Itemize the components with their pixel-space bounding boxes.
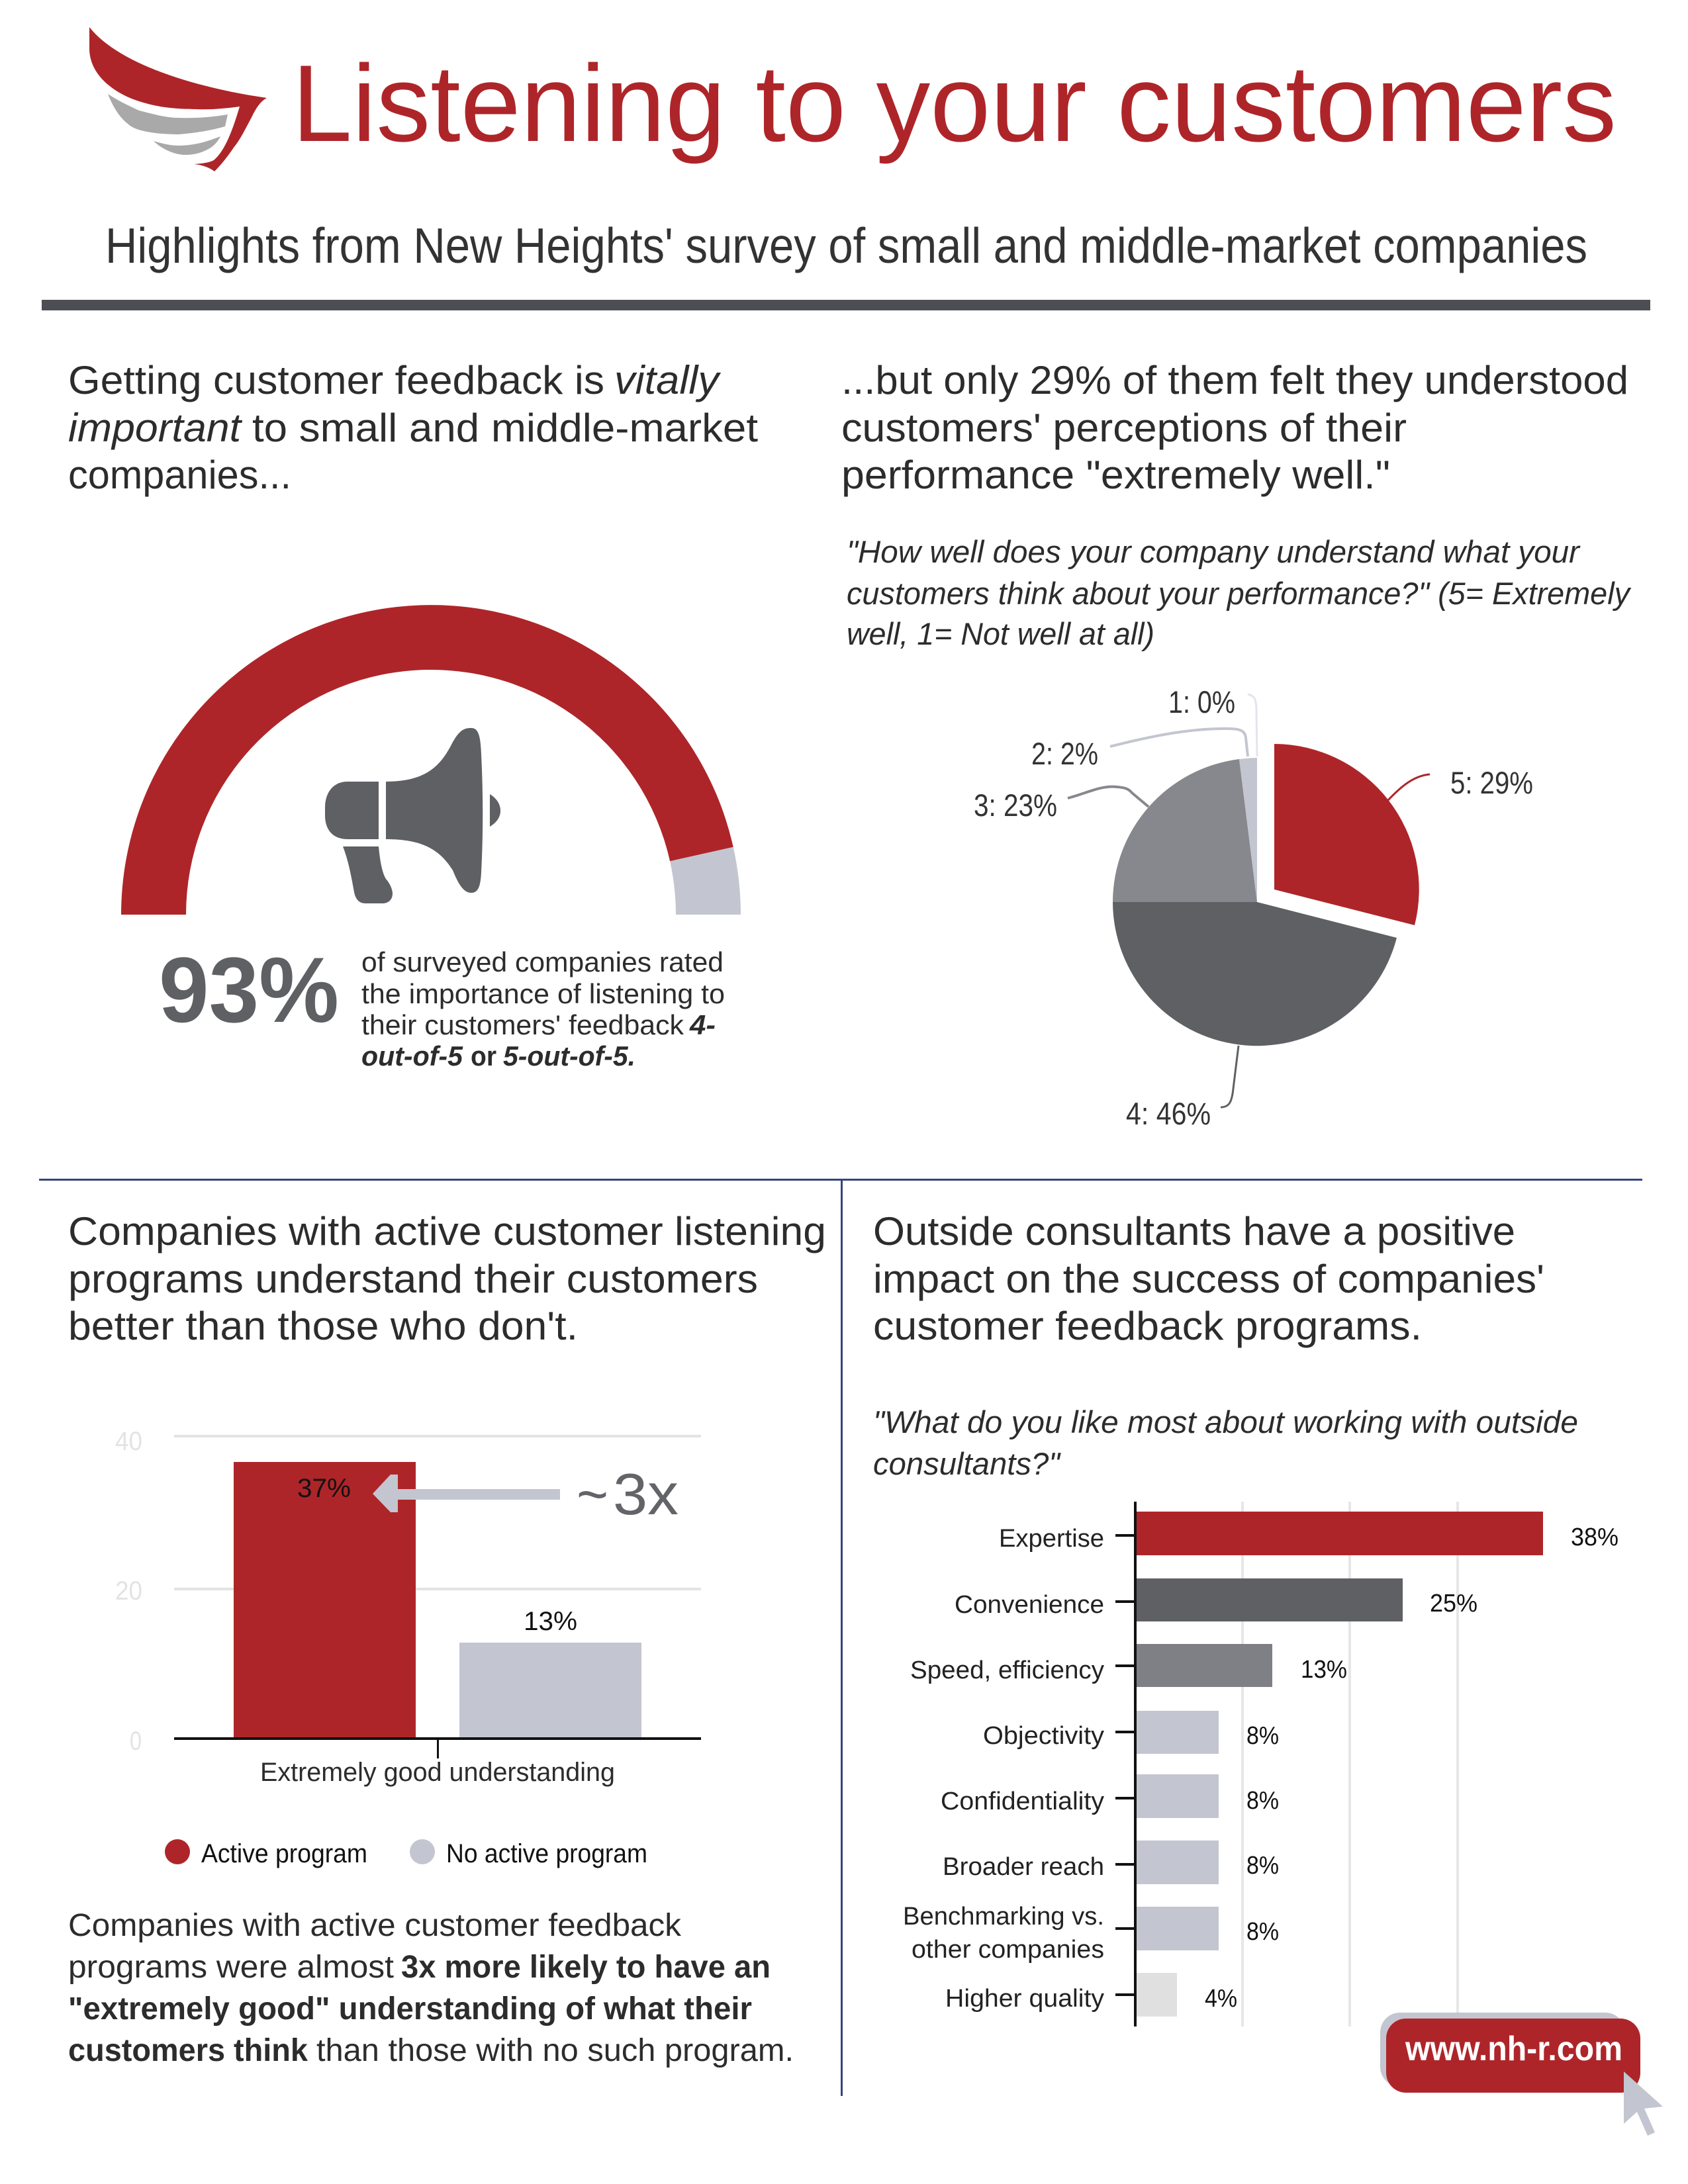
text block: 93 percent explanation: of surveyed companies rated [361, 946, 724, 978]
category labels: Higher quality [945, 1985, 1104, 2013]
value labels [1205, 1524, 1618, 2013]
value labels: 38% [1571, 1524, 1618, 1551]
axis labels: 20 [115, 1576, 142, 1606]
pie chart [974, 684, 1533, 1131]
text block: 93 percent explanation: 5-out-of-5. [503, 1040, 635, 1071]
heading: only 29 percent: performance "extremely well." [841, 453, 1390, 497]
pie labels: 1: 0% [1168, 684, 1235, 719]
pie labels: 2: 2% [1031, 736, 1098, 771]
horizontal bar chart [903, 1502, 1618, 2026]
heading: active listening programs [68, 1209, 826, 1348]
text block: 93 percent explanation [361, 946, 725, 1071]
survey question: "What do you like most about working with outside [873, 1404, 1578, 1439]
x-axis label: Extremely good understanding [260, 1758, 615, 1787]
website address: www.nh-r.com [1405, 2030, 1622, 2068]
pie labels: 3: 23% [974, 788, 1057, 823]
bar: broader reach [1135, 1841, 1219, 1884]
bar: confidentiality [1135, 1774, 1219, 1818]
heading: active listening programs: programs understand their customers [68, 1257, 758, 1301]
heading: outside consultants [873, 1209, 1544, 1348]
category labels: Expertise [999, 1525, 1104, 1553]
heading: vitally important: to small and middle-market [252, 406, 758, 450]
heading: vitally important: vitally [614, 358, 722, 402]
header [89, 27, 1617, 273]
pie labels: 5: 29% [1450, 765, 1533, 800]
heading: outside consultants: Outside consultants have a positive [873, 1209, 1515, 1253]
heading: vitally important [68, 358, 758, 497]
heading: vitally important: Getting customer feedback is [68, 358, 604, 402]
value labels: 8% [1246, 1852, 1279, 1880]
panel: outside consultants [873, 1209, 1618, 2026]
bar: active program [234, 1462, 416, 1739]
category labels: Objectivity [983, 1722, 1104, 1750]
text block: 3x more likely: "extremely good" understanding of what their [68, 1991, 752, 2026]
category labels: Convenience [955, 1591, 1104, 1619]
axis labels: 0 [130, 1727, 142, 1756]
panel: feedback importance [68, 358, 758, 1071]
axis labels: 40 [115, 1427, 142, 1456]
category labels: Speed, efficiency [910, 1657, 1104, 1684]
callout: about 3x: 3x [613, 1461, 679, 1527]
slice: 3 rating 23 percent [1113, 759, 1257, 902]
pie labels: 4: 46% [1126, 1096, 1211, 1131]
website button [1380, 2013, 1663, 2136]
category labels: Benchmarking vs. [903, 1903, 1104, 1931]
category labels: Confidentiality [941, 1788, 1104, 1815]
survey question [873, 1404, 1578, 1481]
category labels: other companies [912, 1936, 1104, 1964]
heading: only 29 percent: customers' perceptions of their [841, 406, 1407, 450]
text block: 3x more likely [68, 1908, 794, 2068]
value: 13 percent: 13% [524, 1607, 577, 1636]
slice: 2 rating 2 percent [1239, 758, 1257, 902]
survey question: customers think about your performance?" (5= Extremely [847, 576, 1631, 611]
survey question: consultants?" [873, 1446, 1061, 1481]
bar: benchmarking [1135, 1907, 1219, 1950]
text block: 3x more likely: customers think [68, 2033, 308, 2068]
legend: No active program [446, 1839, 647, 1868]
pie labels [974, 684, 1533, 1131]
value labels: 8% [1246, 1722, 1279, 1750]
text block: 3x more likely: Companies with active customer feedback [68, 1908, 682, 1943]
value: 37 percent: 37% [297, 1474, 351, 1503]
gauge: 93 percent arc [121, 605, 741, 915]
axis labels [115, 1427, 142, 1756]
heading: outside consultants: customer feedback programs. [873, 1304, 1422, 1348]
category labels [903, 1525, 1104, 2013]
text block: 93 percent explanation: 4- [689, 1009, 716, 1040]
value labels: 25% [1430, 1590, 1477, 1617]
icon: cursor arrow [1624, 2071, 1663, 2136]
column chart [115, 1427, 701, 1787]
value labels: 8% [1246, 1787, 1279, 1815]
value labels: 13% [1301, 1656, 1347, 1684]
heading: outside consultants: impact on the success of companies' [873, 1257, 1544, 1301]
leader lines [1068, 694, 1430, 1107]
icon: red and grey wing logo [89, 27, 267, 171]
bar: higher quality [1135, 1973, 1177, 2017]
icon: megaphone [325, 728, 500, 903]
bar: objectivity [1135, 1711, 1219, 1754]
survey question: "How well does your company understand what your [847, 534, 1581, 569]
legend [165, 1839, 647, 1868]
arrow: about three times [373, 1475, 560, 1512]
bar: no active program [459, 1643, 641, 1739]
bar: expertise [1135, 1512, 1543, 1555]
stat: 93 percent: 93% [159, 938, 339, 1042]
panel: understanding perceptions [841, 358, 1631, 1131]
heading: active listening programs: Companies with active customer listening [68, 1209, 826, 1253]
callout: about 3x: ~ [577, 1461, 608, 1527]
text block: 3x more likely: 3x more likely to have an [401, 1950, 771, 1985]
bar: convenience [1135, 1578, 1403, 1621]
heading: only 29 percent: ...but only 29% of them felt they understood [841, 358, 1628, 402]
legend: Active program [201, 1839, 367, 1868]
panel: active listening programs [68, 1209, 826, 2068]
slice: 4 rating 46 percent [1113, 902, 1397, 1046]
heading: only 29 percent [841, 358, 1628, 497]
text block: 93 percent explanation: the importance of listening to [361, 978, 725, 1009]
text block: 3x more likely: than those with no such program. [316, 2033, 794, 2068]
category labels: Broader reach [943, 1853, 1104, 1881]
value labels: 4% [1205, 1985, 1237, 2013]
callout: about 3x [577, 1461, 679, 1527]
survey question [847, 534, 1631, 651]
bar: speed, efficiency [1135, 1644, 1272, 1687]
heading: vitally important: important [68, 406, 242, 450]
text block: 93 percent explanation: or [471, 1040, 496, 1071]
title: Listening to your customers [292, 42, 1617, 164]
value labels: 8% [1246, 1918, 1279, 1946]
slice: 5 rating 29 percent [1274, 744, 1419, 925]
heading: active listening programs: better than those who don't. [68, 1304, 578, 1348]
heading: vitally important: companies... [68, 453, 291, 497]
text block: 3x more likely: programs were almost [68, 1950, 394, 1985]
text block: 93 percent explanation: their customers' feedback [361, 1009, 684, 1040]
survey question: well, 1= Not well at all) [847, 616, 1154, 651]
text block: 93 percent explanation: out-of-5 [361, 1040, 463, 1071]
